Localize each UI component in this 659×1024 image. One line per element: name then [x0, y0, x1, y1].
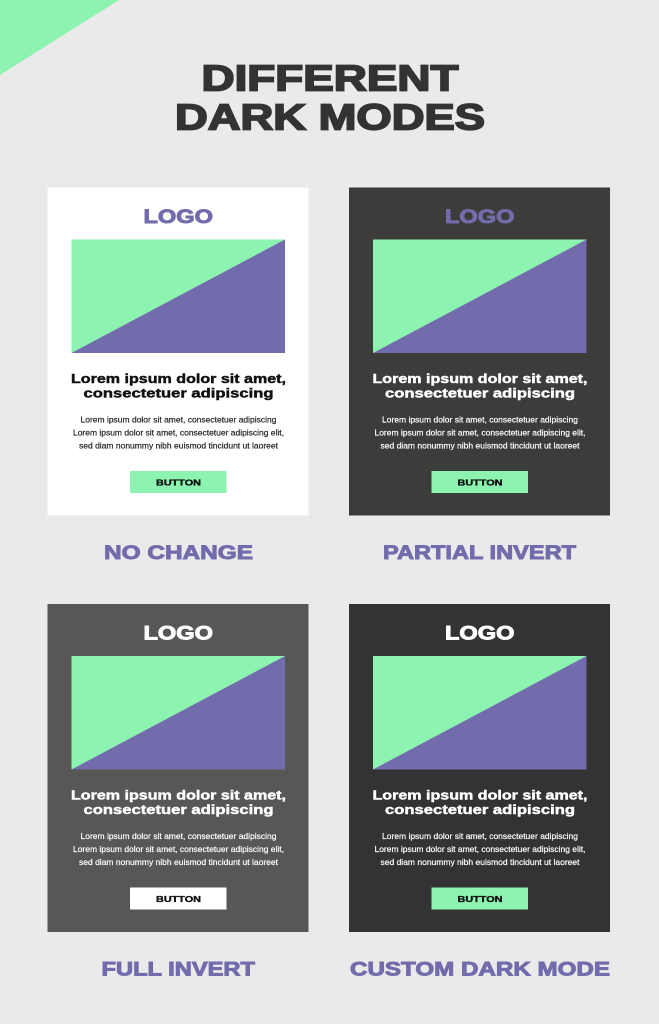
image placeholder [373, 656, 586, 770]
body text: Lorem ipsum dolor sit amet, consectetuer adipiscing [80, 414, 277, 424]
button [130, 888, 226, 910]
body text [73, 414, 284, 450]
headline [372, 371, 588, 400]
body text: Lorem ipsum dolor sit amet, consectetuer adipiscing elit, [374, 428, 586, 438]
body text: Lorem ipsum dolor sit amet, consectetuer adipiscing [382, 414, 578, 424]
title [175, 58, 485, 138]
logo: LOGO [144, 622, 213, 644]
button: BUTTON [156, 478, 201, 488]
headline [71, 371, 286, 400]
headline: consectetuer adipiscing [84, 386, 274, 400]
logo: LOGO [445, 622, 514, 644]
headline: Lorem ipsum dolor sit amet, [372, 371, 588, 386]
body text [374, 831, 586, 867]
label: partial invert: PARTIAL INVERT [383, 543, 576, 564]
image placeholder [72, 656, 285, 770]
logo: LOGO [445, 206, 514, 228]
button [432, 471, 528, 493]
body text [73, 831, 284, 867]
image placeholder [373, 240, 586, 353]
button: BUTTON [458, 894, 503, 904]
label: full invert: FULL INVERT [102, 960, 255, 981]
headline [372, 788, 588, 817]
logo: LOGO [144, 206, 213, 228]
title: DARK MODES [175, 96, 485, 138]
headline: Lorem ipsum dolor sit amet, [71, 788, 286, 802]
button [432, 888, 528, 910]
panel: partial invert [349, 188, 610, 516]
image placeholder [72, 240, 285, 353]
body text: sed diam nonummy nibh euismod tincidunt ut laoreet [380, 857, 580, 867]
button: BUTTON [156, 894, 201, 904]
panel: custom dark mode [349, 604, 610, 932]
button: BUTTON [458, 478, 503, 488]
headline: consectetuer adipiscing [385, 386, 575, 400]
headline: Lorem ipsum dolor sit amet, [71, 371, 286, 386]
body text: sed diam nonummy nibh euismod tincidunt ut laoreet [380, 440, 580, 450]
button [130, 471, 226, 493]
label: no change: NO CHANGE [104, 543, 253, 564]
body text: Lorem ipsum dolor sit amet, consectetuer adipiscing elit, [73, 428, 284, 438]
headline: consectetuer adipiscing [84, 802, 274, 817]
body text: Lorem ipsum dolor sit amet, consectetuer adipiscing [80, 831, 277, 841]
body text: sed diam nonummy nibh euismod tincidunt ut laoreet [79, 857, 279, 867]
headline: Lorem ipsum dolor sit amet, [372, 788, 588, 802]
body text [374, 414, 586, 450]
panel: full invert [48, 604, 308, 932]
panel: no change [48, 188, 308, 516]
body text: Lorem ipsum dolor sit amet, consectetuer adipiscing elit, [73, 844, 284, 854]
body text: Lorem ipsum dolor sit amet, consectetuer adipiscing elit, [374, 844, 586, 854]
body text: sed diam nonummy nibh euismod tincidunt ut laoreet [79, 440, 279, 450]
headline [71, 788, 286, 817]
headline: consectetuer adipiscing [385, 802, 575, 817]
body text: Lorem ipsum dolor sit amet, consectetuer adipiscing [382, 831, 578, 841]
corner triangle [0, 0, 119, 75]
label: custom dark mode: CUSTOM DARK MODE [350, 960, 610, 981]
title: DIFFERENT [202, 58, 458, 98]
